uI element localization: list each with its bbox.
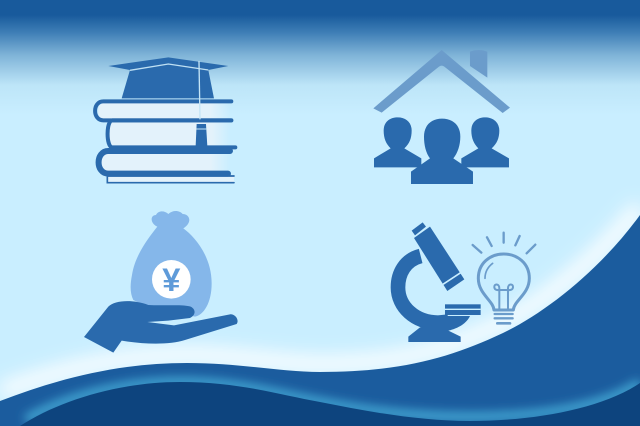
yen symbol: ¥ <box>162 261 181 298</box>
icon: books and graduation cap <box>95 57 235 183</box>
graduation cap <box>108 57 228 146</box>
light bulb <box>473 233 535 323</box>
roof <box>373 50 510 113</box>
dark lower wave <box>20 382 640 426</box>
icon: house and family <box>373 50 510 184</box>
money bag <box>131 211 212 317</box>
icon: hand holding money bag <box>84 211 238 353</box>
book covers <box>95 101 235 183</box>
white glow above wave <box>0 207 640 392</box>
book pages <box>98 103 234 183</box>
family silhouettes <box>374 117 509 184</box>
yen coin <box>152 260 191 299</box>
main blue wave <box>0 215 640 426</box>
teal wave highlight <box>26 382 640 420</box>
microscope <box>398 222 481 342</box>
icon: microscope and light bulb <box>398 222 535 342</box>
hand <box>84 301 238 353</box>
